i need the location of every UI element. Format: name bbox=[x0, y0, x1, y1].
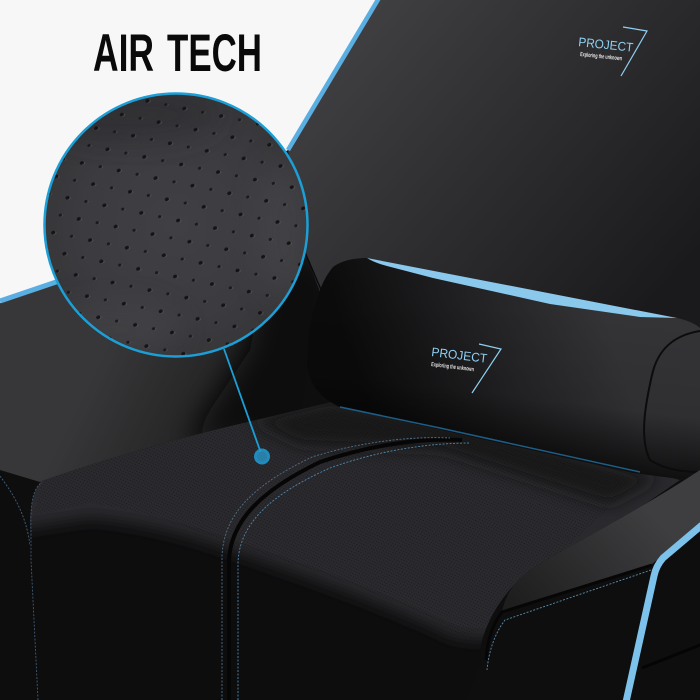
bolster lower piping bbox=[340, 407, 640, 472]
bolster end cap bbox=[644, 331, 700, 472]
bolster pillow bbox=[307, 258, 700, 482]
callout dot on seat bbox=[254, 448, 270, 464]
seat seams and stitching bbox=[31, 438, 470, 700]
right armrest bbox=[480, 470, 700, 700]
title bbox=[93, 24, 262, 83]
logo: bolster bbox=[431, 344, 501, 393]
armrest blue piping bbox=[626, 525, 700, 700]
chair backrest bbox=[288, 0, 700, 350]
seat cushion bbox=[30, 402, 680, 644]
logo: backrest: Exploring the unknown bbox=[580, 52, 622, 62]
bolster blue stripe bbox=[367, 258, 677, 318]
title: AIR bbox=[93, 24, 154, 83]
left armrest bbox=[0, 252, 321, 544]
logo: backrest: PROJECT bbox=[578, 35, 634, 55]
logo: backrest bbox=[578, 27, 647, 76]
callout leader line bbox=[224, 349, 262, 456]
title: TECH bbox=[167, 24, 262, 83]
logo: bolster: Exploring the unknown bbox=[431, 362, 474, 373]
logo: bolster: PROJECT bbox=[431, 345, 488, 366]
magnified leather lens bbox=[40, 87, 315, 360]
